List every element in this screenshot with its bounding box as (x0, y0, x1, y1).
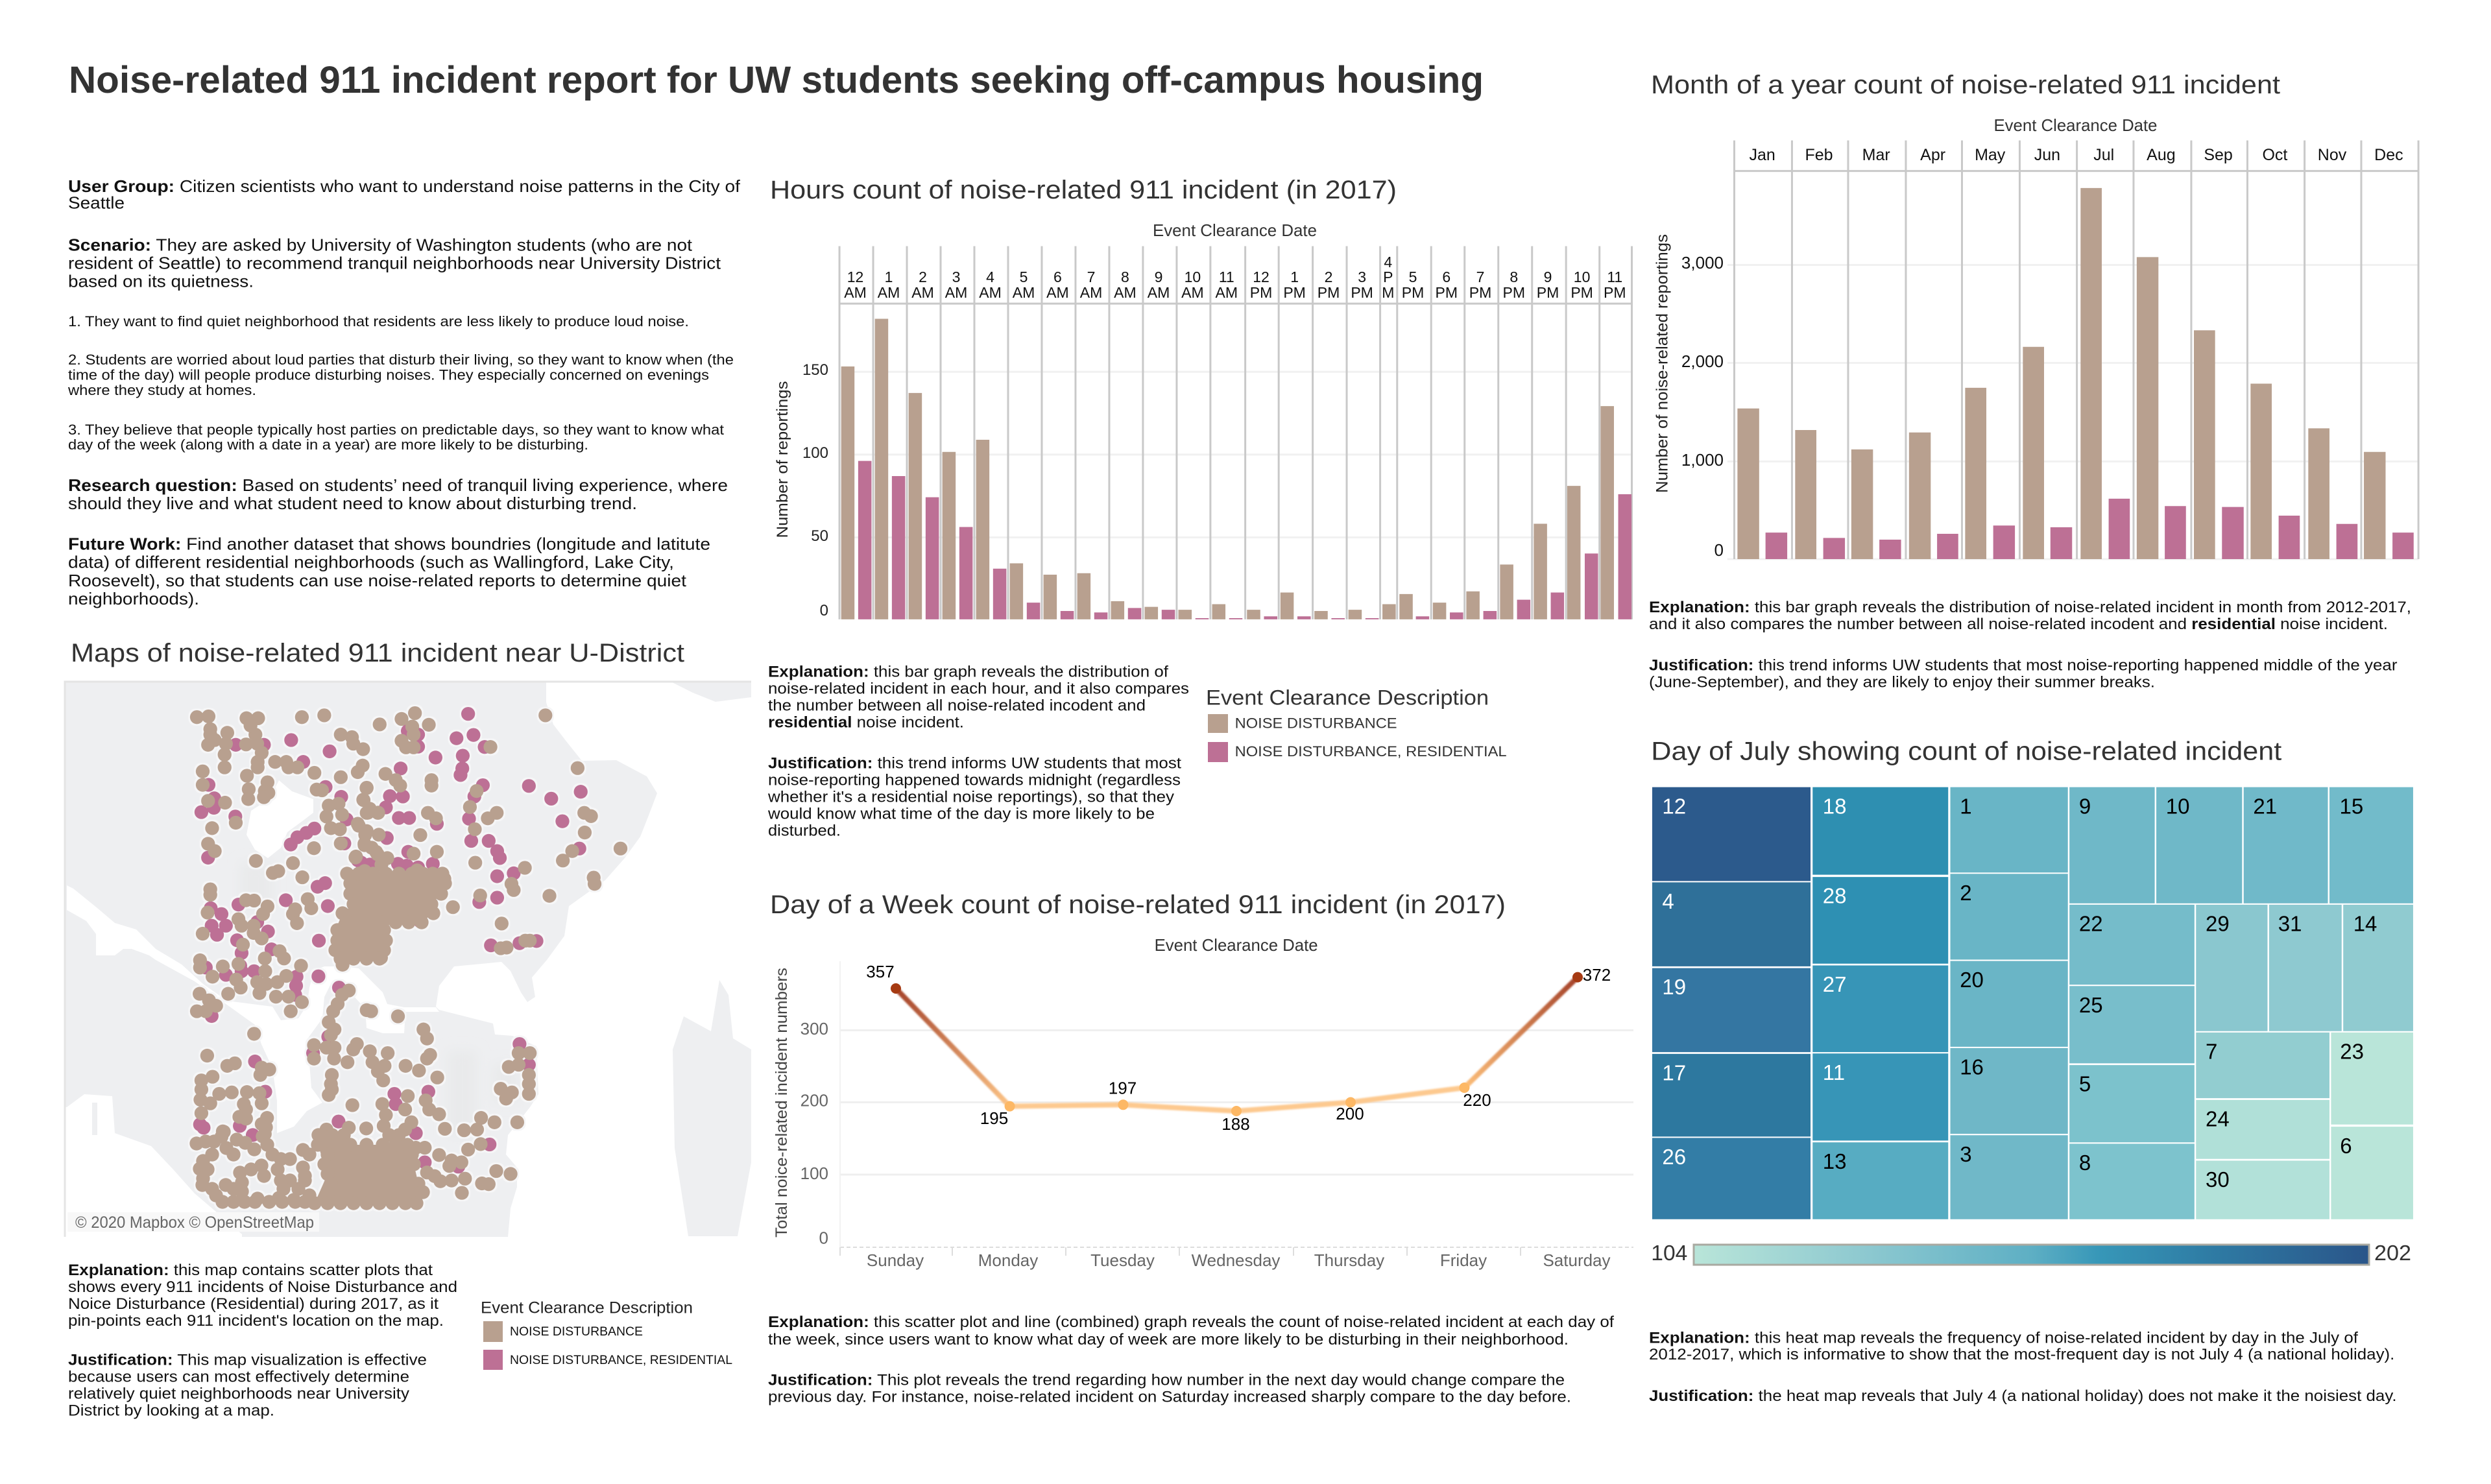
hour header labels: 5 (1020, 269, 1028, 285)
legend: hours: NOISE DISTURBANCE, RESIDENTIAL (1235, 743, 1507, 760)
data labels: 197 (1109, 1078, 1137, 1097)
hour header labels: 4 (986, 269, 994, 285)
y axis title: Number of reportings (774, 381, 791, 538)
treemap labels: 7 (2206, 1039, 2217, 1063)
hour header labels: 5 (1409, 269, 1417, 285)
text block: treemap explanation: 2012-2017, which is informative to show that the most-frequent day is not July 4 (a national holiday). (1649, 1346, 2394, 1363)
y axis ticks: 2,000 (1681, 352, 1724, 371)
text block: hours explanation: would know what time of the day is more likely to be (767, 806, 1155, 822)
map base (65, 682, 751, 1237)
text block: weekday explanation: Explanation: this scatter plot and line (combined) graph reveals the count of noise-related incident at each day of (768, 1313, 1614, 1331)
treemap labels: 10 (2166, 794, 2190, 818)
text block: treemap explanation: Explanation: this heat map reveals the frequency of noise-related incident by day in the July of (1649, 1330, 2358, 1346)
x axis labels (867, 1251, 1611, 1270)
y axis ticks (800, 1019, 828, 1248)
treemap labels: 13 (1823, 1149, 1847, 1173)
future work: Future Work: Find another dataset that shows boundries (longitude and latitute (68, 534, 710, 554)
hour header labels: 8 (1510, 269, 1518, 285)
hour header labels: M (1382, 284, 1394, 301)
text block: map explanation (68, 1262, 457, 1420)
text block: hours explanation: disturbed. (768, 822, 841, 839)
y axis title: Total noice-related incident numbers (773, 968, 791, 1238)
month labels: Apr (1920, 146, 1945, 164)
treemap labels: 30 (2206, 1167, 2230, 1191)
text block: hours explanation: the number between all noise-related incodent and (768, 697, 1146, 715)
legend: hours: NOISE DISTURBANCE (1235, 715, 1397, 731)
legend: map: NOISE DISTURBANCE, RESIDENTIAL (510, 1354, 732, 1367)
treemap labels: 5 (2079, 1072, 2091, 1096)
y axis ticks: 0 (1715, 540, 1724, 560)
scenario item 3: 3. They believe that people typically host parties on predictable days, so they want to know what (68, 422, 724, 438)
treemap labels (1662, 794, 2377, 1191)
trend line (896, 977, 1578, 1111)
treemap cells (1652, 787, 2413, 1219)
hour header labels: P (1383, 269, 1393, 285)
user group: User Group: Citizen scientists who want to understand noise patterns in the City of (68, 176, 741, 196)
bars: residential (1766, 499, 2414, 559)
hour header labels: 6 (1053, 269, 1062, 285)
text block: month explanation: (June-September), and they are likely to enjoy their summer breaks. (1649, 674, 2155, 691)
month labels: Feb (1805, 146, 1833, 164)
scenario: Scenario: They are asked by University of Washington students (who are not (68, 235, 693, 255)
color legend: 202 (2374, 1241, 2411, 1265)
future work: data) of different residential neighborhoods (such as Wallingford, Lake City, (68, 553, 674, 572)
scenario item 2: time of the day) will people produce disturbing noises. They especially concerned on evenings (68, 367, 709, 383)
text block: month explanation: Explanation: this bar graph reveals the distribution of noise-related incident in month from 2012-2017, (1649, 599, 2411, 616)
title: Noise-related 911 incident report for UW students seeking off-campus housing (69, 59, 1484, 101)
text block: map explanation: Noice Disturbance (Residential) during 2017, as it (68, 1295, 439, 1313)
hour header labels: PM (1604, 284, 1626, 301)
text block: hours explanation (767, 664, 1189, 839)
x axis labels: Saturday (1543, 1251, 1611, 1270)
treemap labels: 20 (1960, 968, 1984, 992)
treemap labels: 8 (2079, 1151, 2091, 1175)
heading: weekday chart: Day of a Week count of noise-related 911 incident (in 2017) (770, 891, 1506, 919)
chart: treemap (1652, 787, 2413, 1219)
future work: neighborhoods). (68, 589, 199, 608)
heading: month chart: Month of a year count of noise-related 911 incident (1651, 71, 2280, 99)
treemap labels: 14 (2353, 911, 2377, 935)
y axis ticks: 200 (800, 1091, 828, 1110)
month labels: Oct (2262, 146, 2287, 164)
text block: hours explanation: noise-reporting happened towards midnight (regardless (768, 772, 1181, 789)
hour header labels: 4 (1384, 254, 1392, 270)
heading: hours chart: Hours count of noise-related 911 incident (in 2017) (770, 176, 1397, 204)
legend: map: NOISE DISTURBANCE (510, 1325, 643, 1339)
residential noise points (193, 707, 588, 1173)
scatter points (189, 706, 627, 1210)
hour header labels: 7 (1087, 269, 1095, 285)
hour header labels: PM (1570, 284, 1593, 301)
treemap labels: 6 (2340, 1134, 2352, 1158)
hour header labels: 12 (1253, 269, 1270, 285)
treemap labels: 24 (2206, 1107, 2230, 1131)
text block: treemap explanation (1649, 1330, 2397, 1405)
chart: hours bar chart (774, 221, 1631, 619)
treemap labels: 25 (2079, 993, 2103, 1017)
month labels (1750, 146, 2403, 164)
text block: treemap explanation: Justification: the heat map reveals that July 4 (a national holiday) does not make it the noisiest day. (1649, 1387, 2397, 1405)
legend: hours: Event Clearance Description (1206, 686, 1489, 710)
treemap labels: 21 (2253, 794, 2277, 818)
data labels: 195 (980, 1108, 1008, 1128)
bars: noise disturbance (1737, 188, 2386, 559)
text block: hours explanation: noise-related incident in each hour, and it also compares (768, 680, 1189, 698)
hour header labels: PM (1402, 284, 1424, 301)
text block: map explanation: Justification: This map visualization is effective (68, 1352, 427, 1369)
hour header labels: 11 (1219, 269, 1234, 285)
hour header labels: AM (878, 284, 900, 301)
axis caption: Event Clearance Date (1994, 115, 2158, 135)
hour header labels: PM (1250, 284, 1272, 301)
month labels: Jul (2093, 146, 2114, 164)
grid (840, 961, 1633, 1256)
hour header labels: 2 (919, 269, 927, 285)
treemap labels: 16 (1960, 1055, 1984, 1079)
hour header labels: 3 (1358, 269, 1366, 285)
hour header labels: PM (1537, 284, 1559, 301)
month labels: Mar (1862, 146, 1890, 164)
hour header labels: AM (1013, 284, 1035, 301)
panel: map (65, 682, 751, 1237)
y axis ticks: 1,000 (1681, 450, 1724, 470)
treemap labels: 4 (1662, 889, 1674, 913)
hour header labels: AM (1181, 284, 1204, 301)
text block: hours explanation: whether it's a residential noise reportings), so that they (767, 789, 1174, 806)
y axis ticks: 0 (820, 602, 828, 619)
x axis labels: Monday (978, 1251, 1038, 1270)
treemap labels: 28 (1823, 884, 1847, 908)
x axis labels: Tuesday (1090, 1251, 1155, 1270)
text block: weekday explanation: the week, since users want to know what day of week are more likely to be disturbing in their neighborhood. (768, 1331, 1569, 1348)
hour header labels (844, 254, 1626, 301)
text block: month explanation: Justification: this trend informs UW students that most noise-reporting happened middle of the year (1649, 656, 2398, 675)
text block: hours explanation: residential noise incident. (768, 714, 964, 732)
treemap labels: 23 (2340, 1039, 2364, 1063)
treemap labels: 26 (1662, 1145, 1686, 1169)
user group: Seattle (68, 193, 125, 213)
text block: map explanation: District by looking at a map. (68, 1402, 274, 1420)
x axis labels: Sunday (867, 1251, 924, 1270)
treemap labels: 15 (2339, 794, 2363, 818)
treemap labels: 17 (1662, 1061, 1686, 1084)
treemap labels: 27 (1823, 972, 1847, 996)
future work (68, 534, 710, 608)
hour header labels: 6 (1442, 269, 1450, 285)
scenario item 2: 2. Students are worried about loud parties that disturb their living, so they want to know when (the (68, 352, 734, 368)
scenario (68, 235, 721, 291)
hour header labels: AM (979, 284, 1002, 301)
treemap labels: 9 (2079, 794, 2091, 818)
hour header labels: PM (1351, 284, 1373, 301)
hour header labels: AM (945, 284, 967, 301)
month labels: Jan (1750, 146, 1775, 164)
general noise points (189, 706, 627, 1210)
text block: weekday explanation: Justification: This plot reveals the trend regarding how number in the next day would change compare the (768, 1372, 1565, 1389)
treemap labels: 31 (2278, 911, 2302, 935)
hour header labels: PM (1436, 284, 1458, 301)
hour header labels: 10 (1574, 269, 1590, 285)
hour header labels: 2 (1325, 269, 1332, 285)
month labels: Nov (2318, 146, 2347, 164)
hour header labels: 7 (1476, 269, 1484, 285)
text block: hours explanation: Justification: this trend informs UW students that most (768, 754, 1181, 772)
legend: hours (1206, 686, 1507, 762)
y axis ticks: 0 (819, 1228, 828, 1248)
y axis ticks: 300 (800, 1019, 828, 1038)
data labels: 372 (1583, 965, 1611, 985)
treemap labels: 29 (2206, 911, 2230, 935)
future work: Roosevelt), so that students can use noise-related reports to determine quiet (68, 571, 687, 590)
text block: weekday explanation: previous day. For instance, noise-related incident on Saturday increased sharply compare to the day before. (768, 1389, 1571, 1406)
y axis ticks: 150 (802, 361, 828, 379)
hour header labels: 11 (1607, 269, 1622, 285)
map attribution: © 2020 Mapbox © OpenStreetMap (75, 1214, 314, 1232)
color legend (1651, 1241, 2411, 1265)
y axis ticks: 3,000 (1681, 253, 1724, 272)
text block: map explanation: relatively quiet neighborhoods near University (68, 1385, 409, 1403)
y axis ticks: 50 (811, 527, 828, 545)
text block: map explanation: Explanation: this map contains scatter plots that (68, 1262, 433, 1279)
month labels: Jun (2034, 146, 2060, 164)
heading: treemap: Day of July showing count of noise-related incident (1651, 737, 2281, 766)
hour header labels: AM (844, 284, 867, 301)
treemap labels: 18 (1823, 794, 1847, 818)
y axis ticks: 100 (800, 1164, 828, 1183)
treemap labels: 2 (1960, 881, 1972, 905)
hour header labels: 10 (1185, 269, 1201, 285)
chart: month bar chart (1654, 115, 2418, 560)
x axis labels: Wednesday (1192, 1251, 1280, 1270)
axis caption: Event Clearance Date (1155, 935, 1318, 955)
research question: should they live and what student need to know about disturbing trend. (68, 494, 637, 513)
bars: noise disturbance (841, 319, 1614, 619)
hour header labels: PM (1503, 284, 1525, 301)
treemap labels: 11 (1823, 1060, 1845, 1084)
hour header labels: AM (1080, 284, 1102, 301)
scenario: resident of Seattle) to recommend tranquil neighborhoods near University District (68, 254, 721, 273)
axis caption: Event Clearance Date (1153, 221, 1317, 240)
chart: weekday line chart (773, 935, 1633, 1270)
scenario item 1: 1. They want to find quiet neighborhood that residents are less likely to produce loud noise. (68, 313, 689, 329)
hour header labels: 1 (1290, 269, 1299, 285)
month labels: Aug (2147, 146, 2176, 164)
hour header labels: AM (1216, 284, 1238, 301)
y axis title: Number of noise-related reportings (1654, 234, 1672, 493)
hour header labels: 8 (1121, 269, 1129, 285)
hour header labels: AM (1114, 284, 1137, 301)
data labels (866, 962, 1611, 1134)
hour header labels: PM (1318, 284, 1340, 301)
text block: map explanation: pin-points each 911 incident's location on the map. (68, 1312, 444, 1330)
scenario item 2 (67, 352, 734, 398)
month labels: May (1975, 146, 2006, 164)
scenario item 3: day of the week (along with a date in a year) are more likely to be disturbing. (68, 437, 588, 453)
treemap labels: 3 (1960, 1142, 1972, 1166)
text block: project description (67, 176, 741, 608)
hour header labels: 12 (847, 269, 863, 285)
treemap labels: 22 (2079, 911, 2103, 935)
research question: Research question: Based on students’ need of tranquil living experience, where (68, 475, 728, 495)
text block: weekday explanation (768, 1313, 1614, 1406)
legend: map: Event Clearance Description (481, 1298, 693, 1317)
treemap labels: 19 (1662, 975, 1686, 999)
research question (68, 475, 728, 513)
scenario: based on its quietness. (68, 272, 254, 291)
text block: map explanation: shows every 911 incidents of Noise Disturbance and (68, 1278, 457, 1296)
text block: hours explanation: Explanation: this bar graph reveals the distribution of (768, 664, 1168, 681)
hour header labels: 9 (1155, 269, 1162, 285)
hour header labels: PM (1469, 284, 1491, 301)
text block: month explanation: and it also compares the number between all noise-related incodent and residential noise incident. (1649, 616, 2388, 633)
plot area (839, 246, 1631, 619)
data labels: 357 (866, 962, 895, 981)
color legend: 104 (1651, 1241, 1687, 1265)
scenario item 2: where they study at homes. (67, 382, 256, 398)
y axis ticks (802, 361, 828, 619)
data points (891, 972, 1583, 1116)
hour header labels: 3 (952, 269, 960, 285)
month labels: Sep (2204, 146, 2233, 164)
heading: map: Maps of noise-related 911 incident near U-District (71, 639, 684, 667)
text block: month explanation (1649, 599, 2411, 691)
data labels: 188 (1221, 1114, 1250, 1134)
text block: map explanation: because users can most effectively determine (68, 1369, 409, 1386)
hour header labels: 9 (1544, 269, 1552, 285)
bars: residential (858, 461, 1631, 619)
x axis labels: Thursday (1314, 1251, 1384, 1270)
scenario item 3 (68, 422, 724, 453)
hour header labels: PM (1283, 284, 1306, 301)
treemap labels: 1 (1960, 794, 1972, 818)
treemap labels: 12 (1662, 794, 1686, 818)
hour header labels: 1 (885, 269, 893, 285)
data labels: 200 (1336, 1104, 1364, 1123)
legend: map (481, 1298, 732, 1370)
hour header labels: AM (911, 284, 934, 301)
hour header labels: AM (1148, 284, 1170, 301)
hour header labels: AM (1046, 284, 1069, 301)
user group (68, 176, 741, 213)
month labels: Dec (2374, 146, 2403, 164)
y axis ticks: 100 (802, 444, 828, 462)
y axis ticks (1681, 253, 1724, 560)
data labels: 220 (1463, 1090, 1491, 1110)
plot area (1727, 140, 2418, 559)
x axis labels: Friday (1440, 1251, 1487, 1270)
